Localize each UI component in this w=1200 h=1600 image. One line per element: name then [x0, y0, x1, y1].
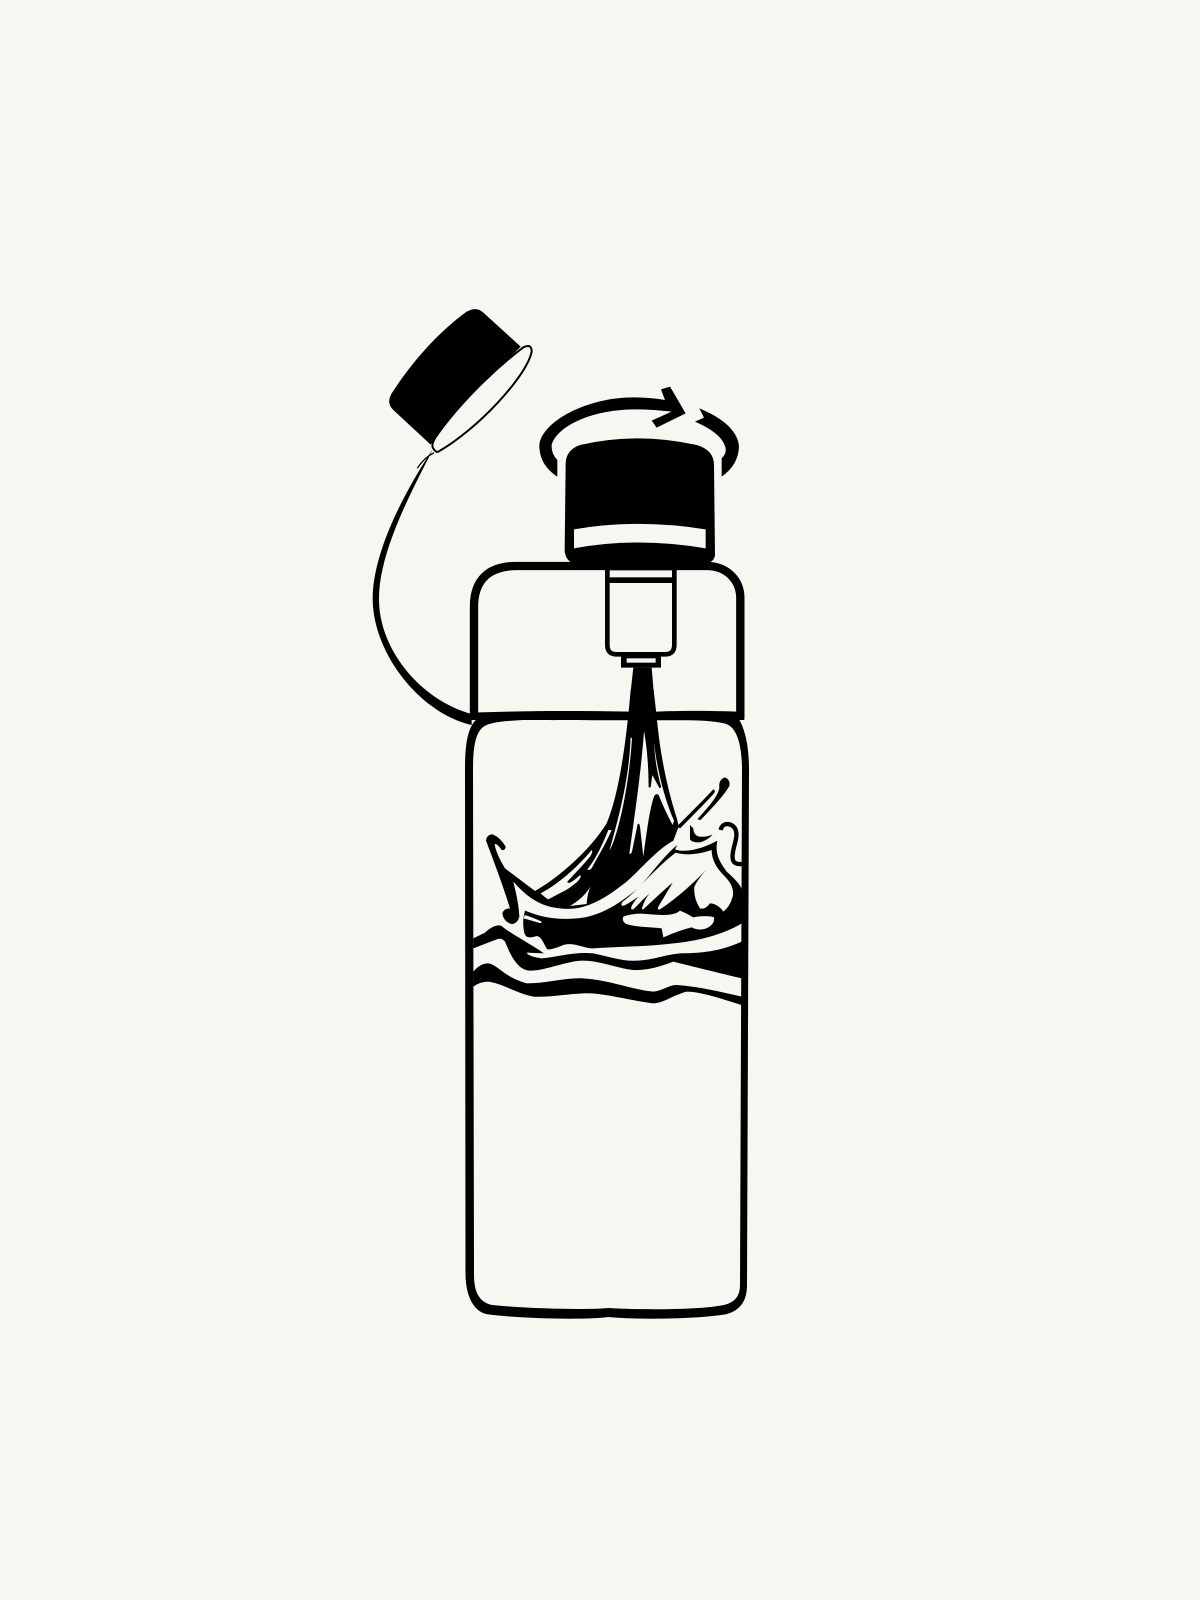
icon: tether strap — [373, 449, 472, 725]
splash right white area — [621, 850, 733, 912]
icon: rotation arrow left — [539, 387, 686, 477]
splash stream and left spike — [486, 690, 679, 924]
splash foam blob — [623, 911, 714, 937]
spray tip — [697, 777, 730, 820]
bottle shoulder section — [470, 566, 744, 720]
stream highlights — [541, 731, 674, 906]
icon: rotation arrow right — [695, 408, 739, 477]
spray hook — [690, 825, 713, 842]
icon: screw cap — [565, 438, 715, 563]
icon: open lid — [389, 309, 532, 452]
bottle lower body — [465, 712, 749, 1319]
splash highlight slit — [523, 915, 542, 923]
spray squiggle — [721, 824, 742, 864]
wave band upper — [473, 925, 742, 978]
splash lower mass — [523, 841, 742, 949]
nozzle — [605, 562, 677, 692]
bottle upper assembly — [373, 309, 744, 725]
water splash and waves — [473, 690, 742, 1005]
wave band lower — [473, 963, 742, 1005]
spray droplet — [677, 789, 715, 828]
